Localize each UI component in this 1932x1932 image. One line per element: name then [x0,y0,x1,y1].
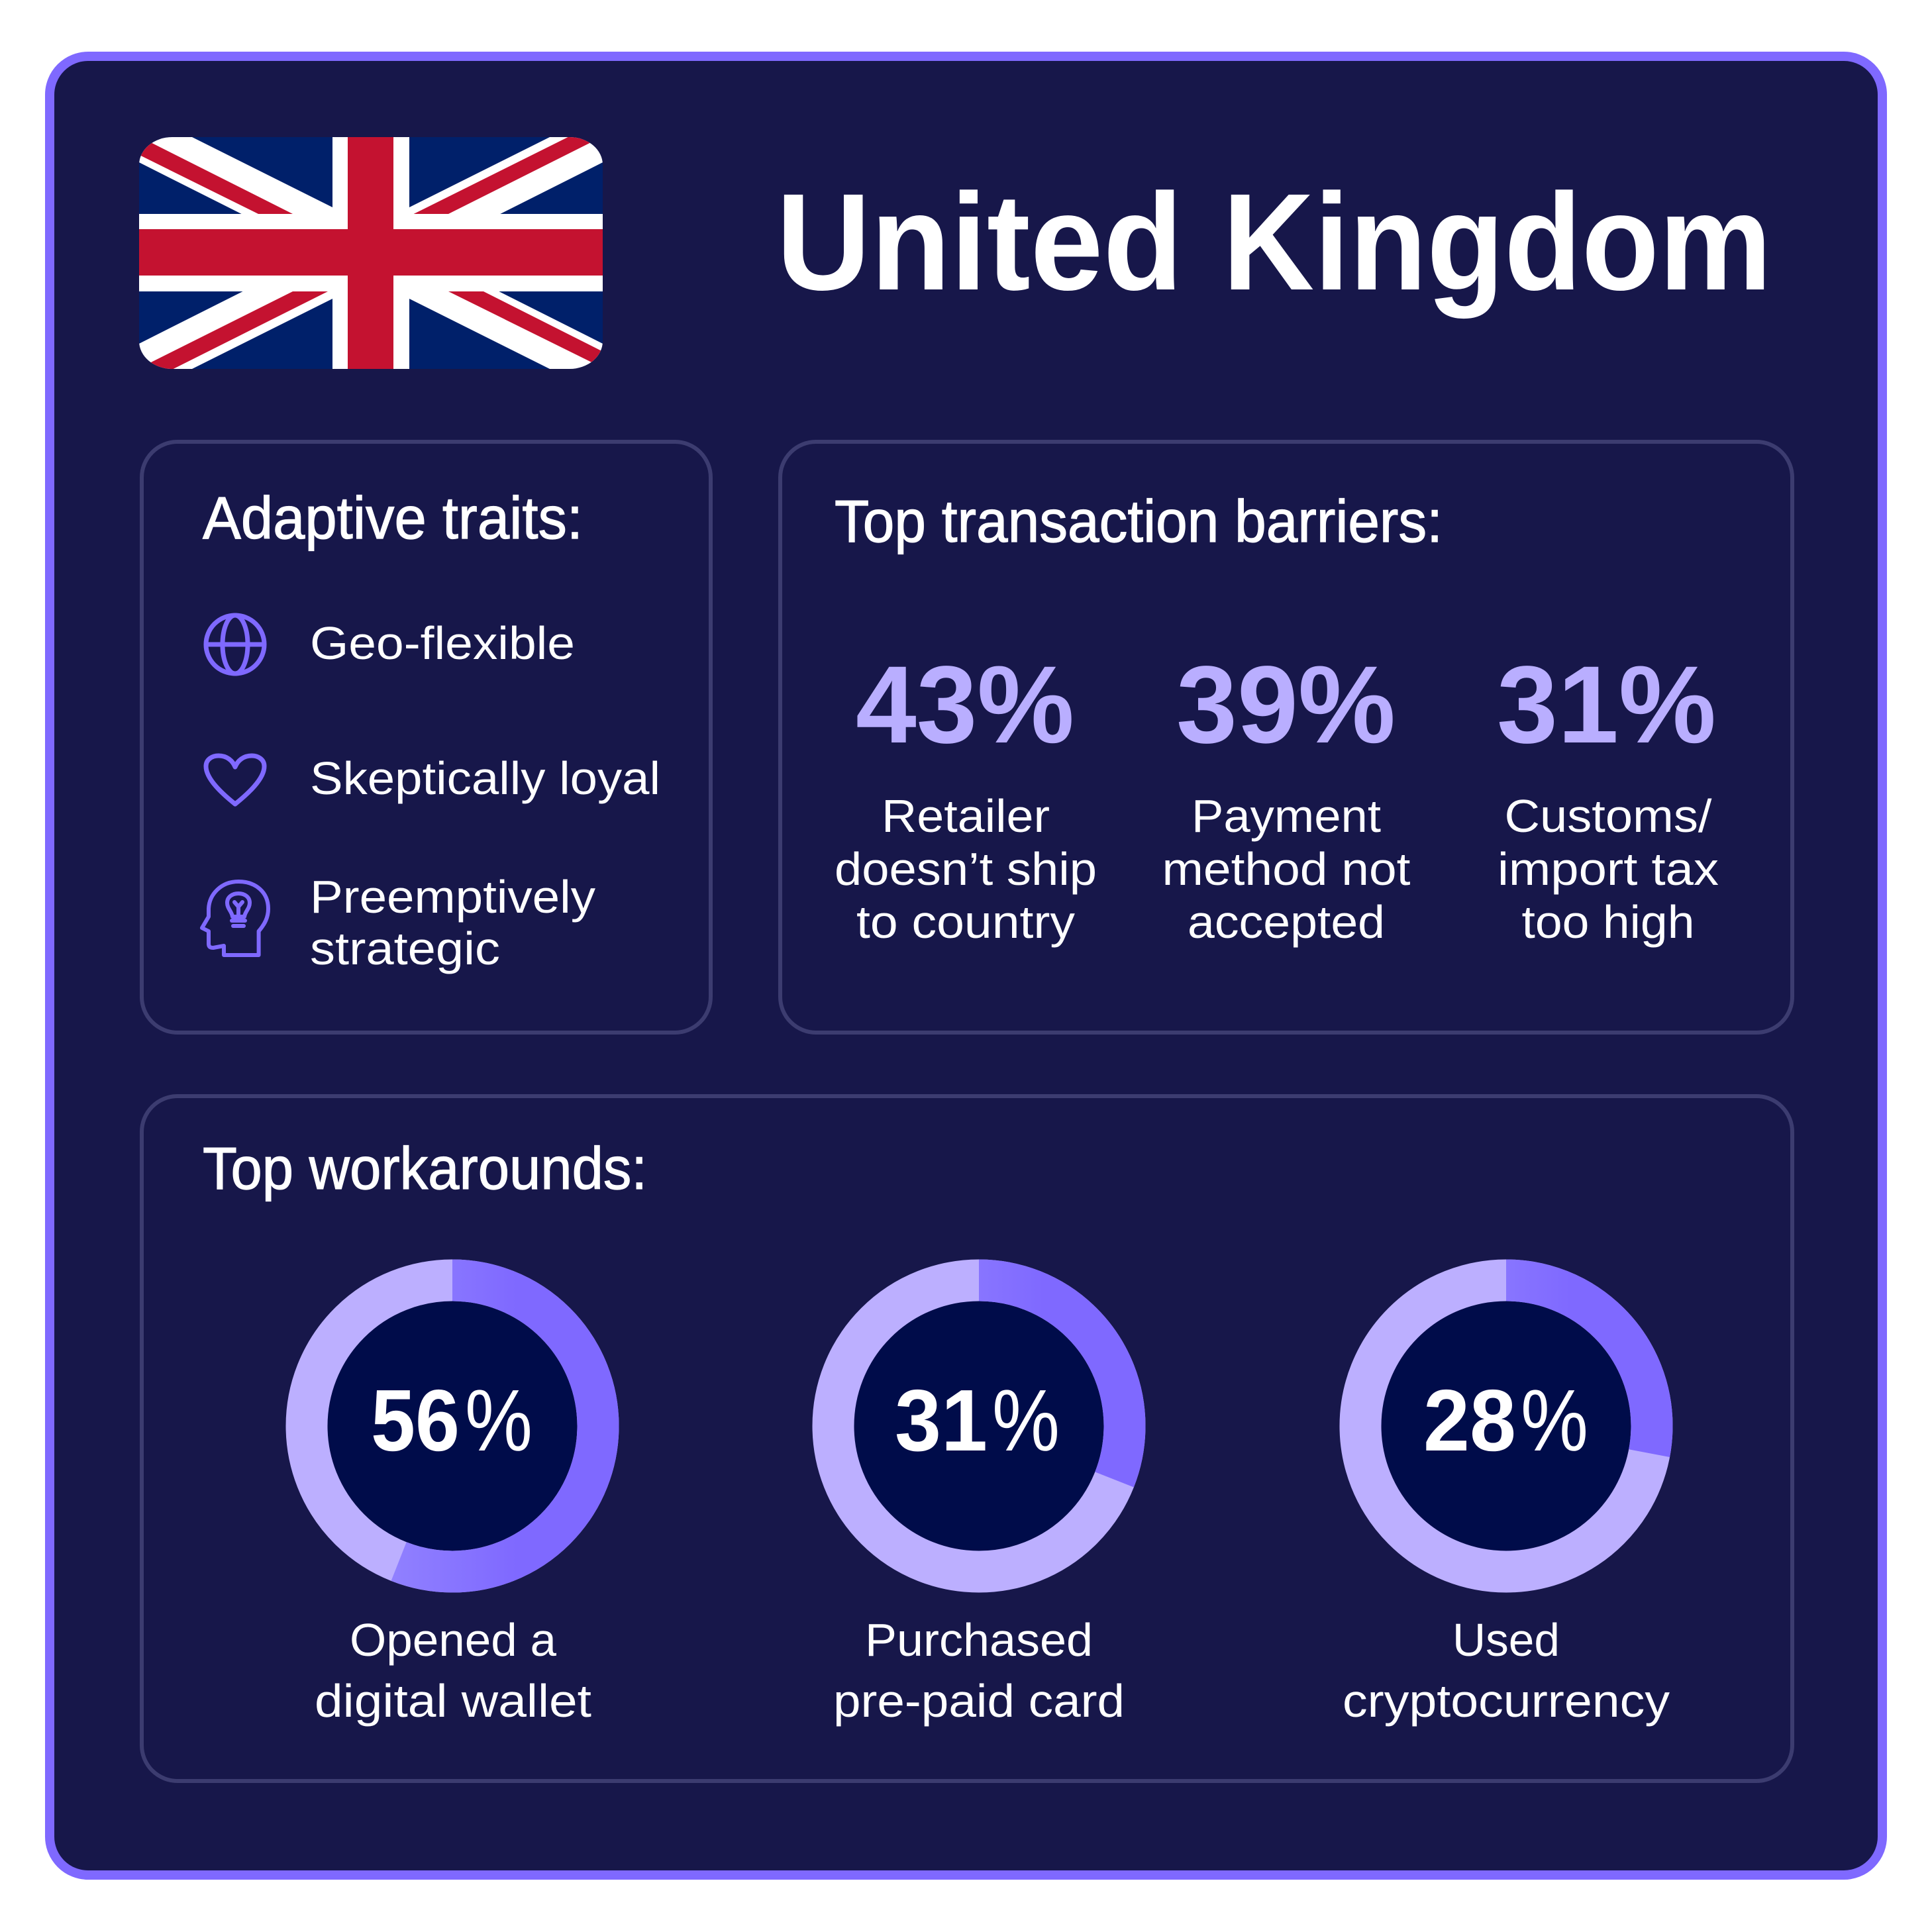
barrier: 31 percent: import tax [1498,843,1719,895]
barrier: 39 percent: Payment [1192,790,1381,842]
flag of the United Kingdom [139,137,603,369]
icon: head with lightbulb [202,882,268,955]
icon: heart [206,756,264,804]
trait: preemptively strategic: strategic [310,923,500,974]
title [776,166,1772,319]
trait: preemptively strategic [310,871,595,974]
trait: skeptically loyal: Skeptically loyal [310,752,660,804]
title: United [776,166,1183,319]
donut: 56 percent opened a digital wallet: Opened a [350,1614,556,1666]
panel: adaptive traits [142,442,711,1033]
donut: 28 percent used cryptocurrency: cryptocurrency [1343,1675,1670,1727]
barrier: 43 percent: doesn’t ship [835,843,1097,895]
donut: 56 percent opened a digital wallet [307,1280,598,1727]
trait: preemptively strategic: Preemptively [310,871,595,923]
donut: 31 percent purchased pre-paid card: 31 [895,1372,988,1469]
donut: 31 percent purchased pre-paid card: Purchased [865,1614,1093,1666]
donut: 31 percent purchased pre-paid card [833,1280,1125,1727]
barrier: 43 percent: Retailer [882,790,1050,842]
donut: 31 percent purchased pre-paid card: pre-paid card [833,1675,1125,1727]
barrier: 39 percent: method not [1162,843,1411,895]
donut: 31 percent purchased pre-paid card: % [992,1372,1060,1469]
barrier: 43 percent: 43% [856,644,1074,766]
donut: 28 percent used cryptocurrency: 28 [1423,1372,1516,1469]
title: Kingdom [1223,166,1772,319]
barrier: 43 percent [835,644,1097,948]
trait: geo-flexible: Geo-flexible [310,617,575,669]
barrier: 31 percent: too high [1522,896,1694,948]
barrier: 39 percent [1162,644,1411,948]
barrier: 39 percent: accepted [1188,896,1385,948]
barrier: 39 percent: 39% [1176,644,1396,766]
panel: top transaction barriers [780,442,1792,1033]
donut: 56 percent opened a digital wallet: 56 [371,1372,460,1469]
donut: 56 percent opened a digital wallet: digital wallet [315,1675,591,1727]
donut: 56 percent opened a digital wallet: % [465,1372,533,1469]
heading: top workarounds: Top workarounds: [203,1136,647,1202]
donut: 28 percent used cryptocurrency: Used [1452,1614,1560,1666]
barrier: 31 percent: 31% [1497,644,1716,766]
donut: 28 percent used cryptocurrency [1343,1280,1670,1727]
heading: top transaction barriers: Top transaction barriers: [835,489,1443,555]
panel: top workarounds [142,1096,1792,1781]
barrier: 31 percent: Customs/ [1505,790,1712,842]
icon: globe [206,615,264,674]
donut: 28 percent used cryptocurrency: % [1521,1372,1588,1469]
heading: adaptive traits: Adaptive traits: [203,485,583,552]
barrier: 31 percent [1497,644,1719,948]
barrier: 43 percent: to country [856,896,1075,948]
